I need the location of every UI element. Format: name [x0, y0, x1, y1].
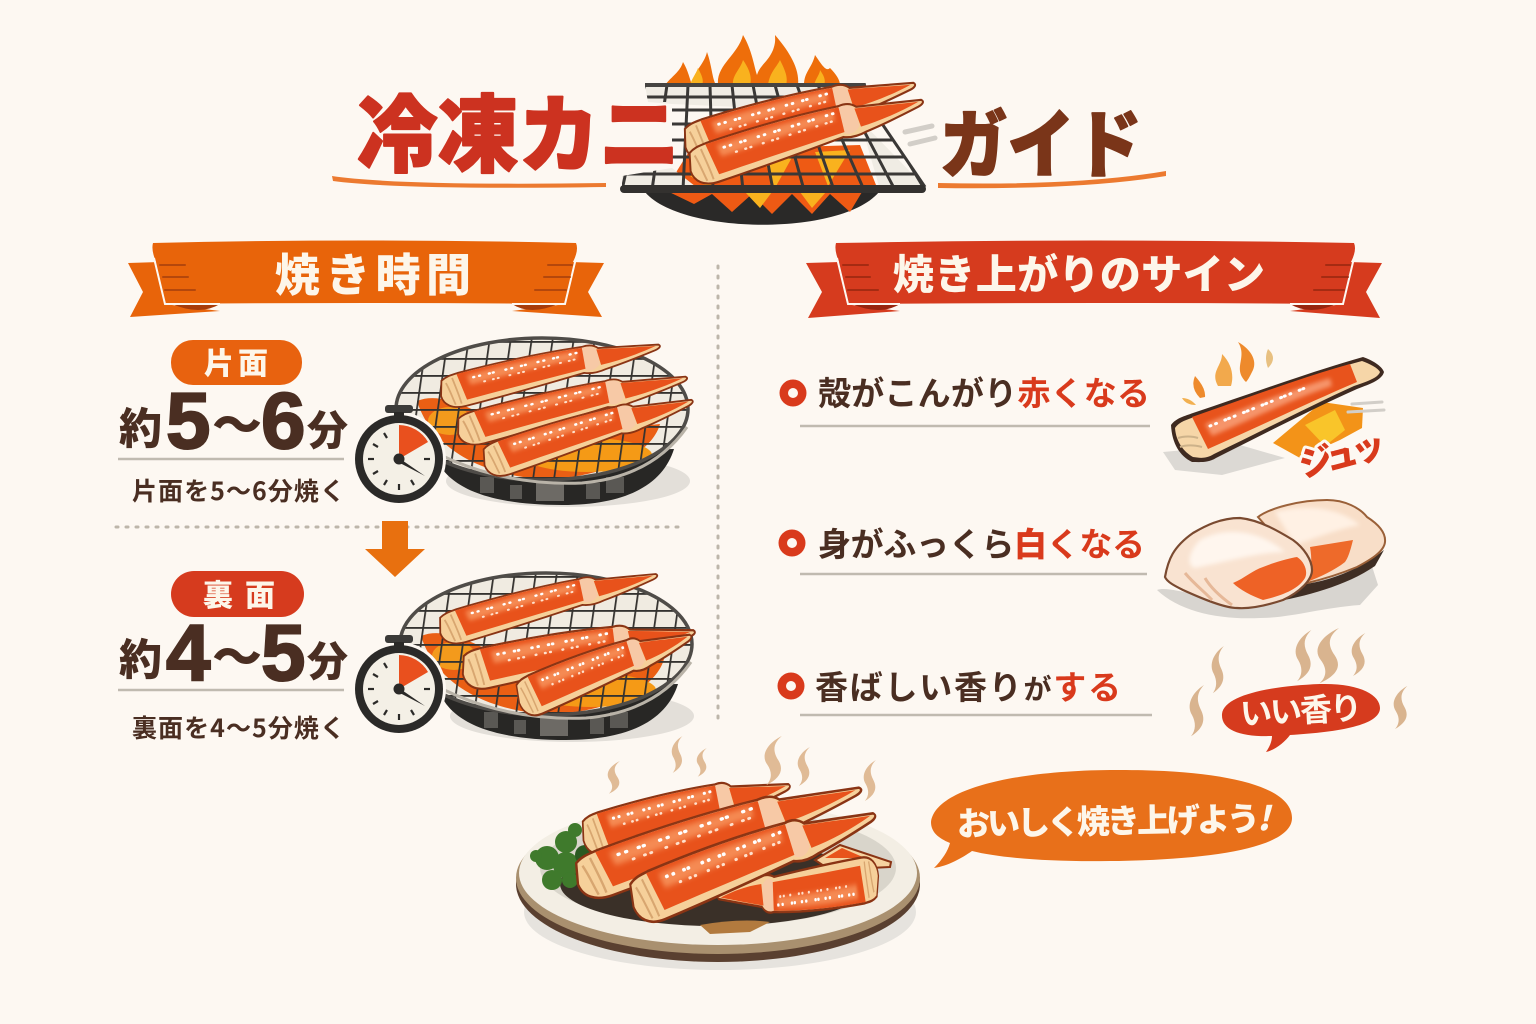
- sign 2: meat turns white: [778, 518, 1147, 574]
- icon: stopwatch: [352, 405, 446, 506]
- pill: 裏面: [171, 571, 304, 617]
- illustration: white crab meat: [1157, 500, 1385, 618]
- caption: 裏面を4〜5分焼く: [132, 709, 345, 745]
- parsley garnish: [530, 823, 595, 890]
- time: 約4〜5分: 約: [119, 626, 162, 688]
- time: 約4〜5分: 分: [307, 628, 348, 688]
- time: 約4〜5分: 〜: [212, 618, 262, 688]
- bullet: [778, 672, 804, 700]
- label: ジュッ: ジュッ: [1293, 417, 1390, 487]
- grill illustration: first side: [392, 333, 699, 507]
- bullet: [778, 530, 806, 556]
- icon: grate: [600, 85, 940, 190]
- caption: 片面を5〜6分焼く: [132, 472, 345, 508]
- pill label: 片面: [204, 339, 268, 383]
- title: 冷凍カニ: 冷凍カニ: [357, 69, 680, 190]
- icon: charcoal bowl: [642, 188, 882, 225]
- plate: [516, 801, 920, 970]
- icon: stopwatch: [352, 635, 446, 736]
- speech bubble: おいしく焼き上げよう!: おいしく焼き上げよう!: [957, 792, 1273, 846]
- banner: 焼き時間: [128, 239, 604, 317]
- banner text: 焼き上がりのサイン: [893, 241, 1265, 301]
- title: ガイド: ガイド: [940, 86, 1142, 193]
- title underline right: [938, 171, 1166, 188]
- icon: flames: [665, 35, 840, 85]
- grill illustration: second side: [396, 563, 700, 742]
- horizontal dotted divider: [116, 526, 682, 528]
- pill: 片面: [171, 340, 302, 385]
- panel: first side: [118, 339, 348, 508]
- text: 身がふっくら白くなる: [818, 518, 1145, 566]
- time: 約5〜6分: 〜: [212, 386, 262, 456]
- icon: crab legs on hero grill: [679, 69, 930, 188]
- panel: second side: [118, 571, 348, 745]
- banner text: 焼き時間: [275, 239, 471, 304]
- title underline left: [332, 176, 606, 188]
- arrow down: [365, 521, 425, 577]
- text: 殻がこんがり赤くなる: [818, 367, 1150, 415]
- sign 1: shell turns red: [780, 367, 1150, 426]
- time: 約5〜6分: 6: [261, 376, 306, 465]
- speech bubble: いい香り: いい香り: [1239, 683, 1363, 735]
- time: 約5〜6分: 分: [307, 397, 348, 457]
- time: 約5〜6分: 約: [119, 395, 162, 457]
- illustration: seared crab leg: [1163, 342, 1390, 487]
- text: 香ばしい香りがする: [815, 661, 1121, 709]
- sign 3: aroma: [778, 661, 1152, 715]
- bullet: [780, 380, 806, 406]
- speech bubble: いい香り: [1222, 683, 1380, 752]
- pill label: 裏面: [203, 571, 275, 615]
- time: 約5〜6分: [119, 376, 348, 465]
- speech bubble: おいしく焼き上げよう!: [931, 770, 1292, 868]
- time: 約4〜5分: [119, 608, 348, 697]
- hero: grill with flames: [600, 35, 940, 225]
- illustration: plated crab legs: [516, 736, 920, 970]
- time: 約4〜5分: 5: [261, 608, 306, 697]
- illustration: aroma steam: [1190, 628, 1407, 736]
- steam: [608, 736, 876, 801]
- banner: 焼き上がりのサイン: [806, 240, 1382, 318]
- time: 約5〜6分: 5: [166, 376, 210, 465]
- time: 約4〜5分: 4: [166, 608, 211, 697]
- vertical dotted divider: [716, 266, 720, 726]
- crab legs: [569, 770, 891, 927]
